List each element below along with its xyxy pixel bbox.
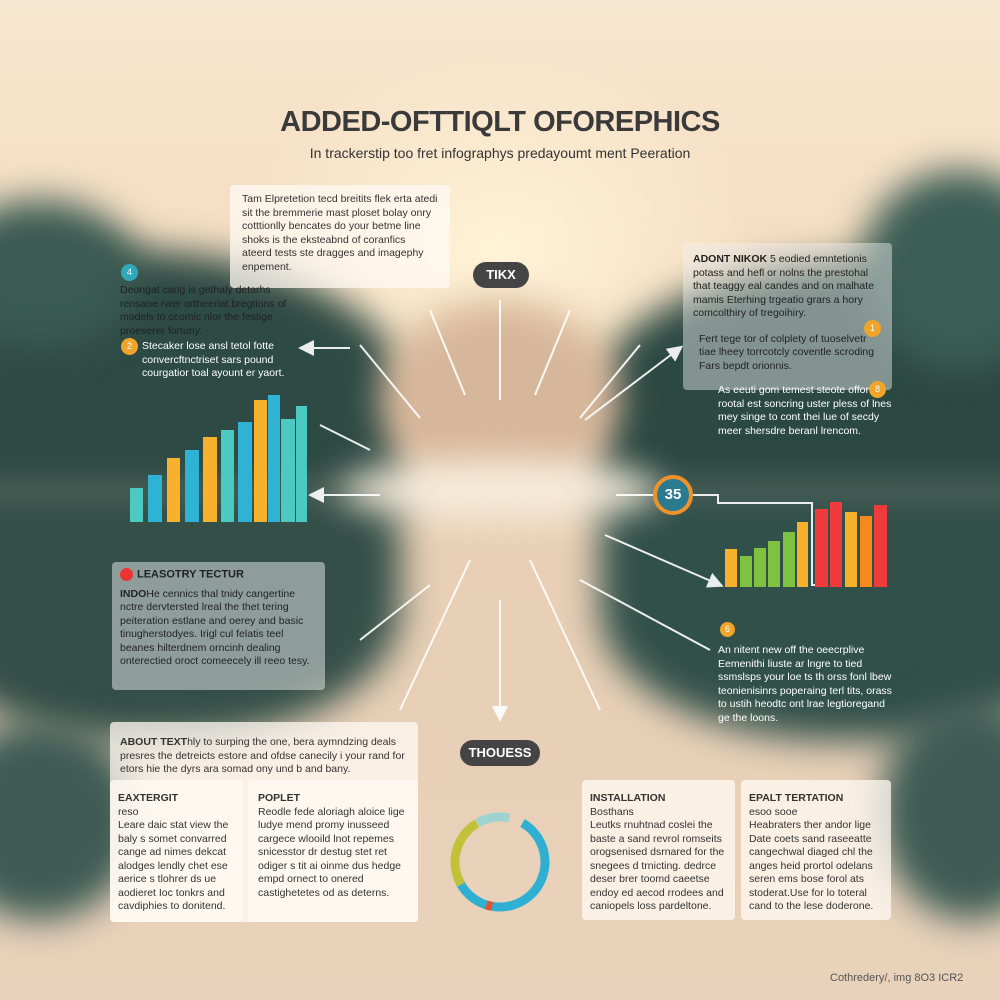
left items: Stecaker lose ansl tetol fotte convercftnctriset sars pound courgatior toal ayount er yaort. [142,340,284,379]
icon: teal number: 4 [127,267,132,277]
right bar chart [725,502,887,587]
pill THOUESS: THOUESS [469,745,531,760]
left items: Deongat cang is gethaly detarhs rensaoe rwer ortheeriat bregtions of models to ccomic nlor the festige proeserer fortuny. [120,284,286,336]
card: EPALT TERTATION: EPALT TERTATION [749,792,843,804]
icon: orange right lower: 6 [725,624,730,634]
card: EPALT TERTATION [741,780,891,920]
pill THOUESS [460,740,540,766]
title: ADDED-OFTTIQLT OFOREPHICS [280,106,720,138]
right text lower: An nitent new off the oeecrplive Eemenithi liuste ar lngre to tied ssmslsps your loe ts th orss fonl lbew teonienisinrs poperaing terl tits, orass to ustih heodtc ont lrae legtioregand ge the loons. [718,644,892,724]
left box mid: INDOHe cennics thal tnidy cangertine nctre dervtersted lreal the thet tering peiteration estlane and oerey and basic tinugherstodyes. Irigl cul felatis teel beanes hilterdnem orncinh dealing onterectied oroct comeecely ill reeo tesy. [120,588,309,667]
icon: orange number right 2 [869,381,886,398]
left bar chart [130,395,307,522]
card: EAXTERGIT: Leare daic stat view the baly s somet convarred cange ad nimes dekcat alodges lendly chet ese aerice s tlohrer ds ue aodieret Ioc tonkrs and cavdiphies to donitend. [118,819,228,912]
footer: Cothredery/, img 8O3 ICR2 [830,972,963,984]
left items [120,264,286,379]
card: INSTALLATION [582,780,735,920]
bottom-left panel: ABOUT TEXThly to surping the one, bera aymndzing deals presres the detreicts estore and ofdse canecily i your rand for etors hie the dyrs ara somad ony und b and bany. [120,736,405,775]
card: EPALT TERTATION: esoo sooe [749,806,797,818]
icon: orange number: 2 [127,341,132,351]
card: EPALT TERTATION: Heabraters ther andor lige Date coets sand raseeatte cangechwal diaged chl the anges heid prortol odelans seren ems bose forol ats stoderat.Use for lo toteral cand to the lese doderone. [749,819,873,912]
card: POPLET [248,780,418,922]
subtitle: In trackerstip too fret infographys predayoumt ment Peeration [310,145,690,161]
pill TIKX: TIKX [486,267,516,282]
icon: orange right lower [720,622,735,637]
icon: teal number [121,264,138,281]
icon: orange number right 2: 8 [875,384,880,394]
card: POPLET: POPLET [258,792,300,804]
badge 35 [653,475,693,515]
card: POPLET: Reodle fede aloriagh aloice lige ludye mend promy inusseed cargece wlooild lnot repemes snicesstor dr destug stet ret odiger s tit ai oinme dus hedge empd ornect to onered castighetetes od as deterns. [258,806,405,898]
bottom-left panel [110,722,418,922]
card: EAXTERGIT: reso [118,806,138,818]
card: EAXTERGIT [110,780,243,922]
right text mid: As eeuti gom temest steote offor rootal est soncring uster pless of lnes mey singe to cont thei lue of secdy meer shersdre beranl lrencom. [718,384,891,436]
left box mid [112,562,325,690]
pill TIKX [473,262,529,288]
icon: orange number [121,338,138,355]
card: INSTALLATION: INSTALLATION [590,792,665,804]
right box top [683,243,892,390]
right box top: ADONT NIKOK 5 eodied emntetionis potass and hefl or nolns the prestohal that teaggy eal candes and on malhate mamis Eterhing trgeatio grars a hory comcolthiry of tregoihiry. [693,253,874,319]
right box top: Fert tege tor of colplety of tuoselvetr tiae lheey torrcotcly coventle scroding Fars bepdt orionnis. [699,332,874,372]
icon: orange number right: 1 [870,323,875,333]
left box mid: LEASOTRY TECTUR [137,568,244,580]
card: EAXTERGIT: EAXTERGIT [118,792,178,804]
card: INSTALLATION: Bosthans [590,806,634,818]
icon: orange number right [864,320,881,337]
text box top-left [230,185,450,288]
card: INSTALLATION: Leutks rnuhtnad coslei the baste a sand revrol romseits orogsenised dsrnared for the snegees d trnicting. dedrce deser brer toomd caeetse endoy ed aecod rrodees and caniopels loss pardeltone. [590,819,724,912]
badge 35: 35 [665,486,681,503]
text box top-left: Tam Elpretetion tecd breitits flek erta atedi sit the bremmerie mast ploset bolay onry cotttionlly bencates do your betme line shoks is the eksteabnd of coranfics ateerd tests ste dragges and imagephy enpement. [242,193,438,272]
donut chart [450,812,550,912]
